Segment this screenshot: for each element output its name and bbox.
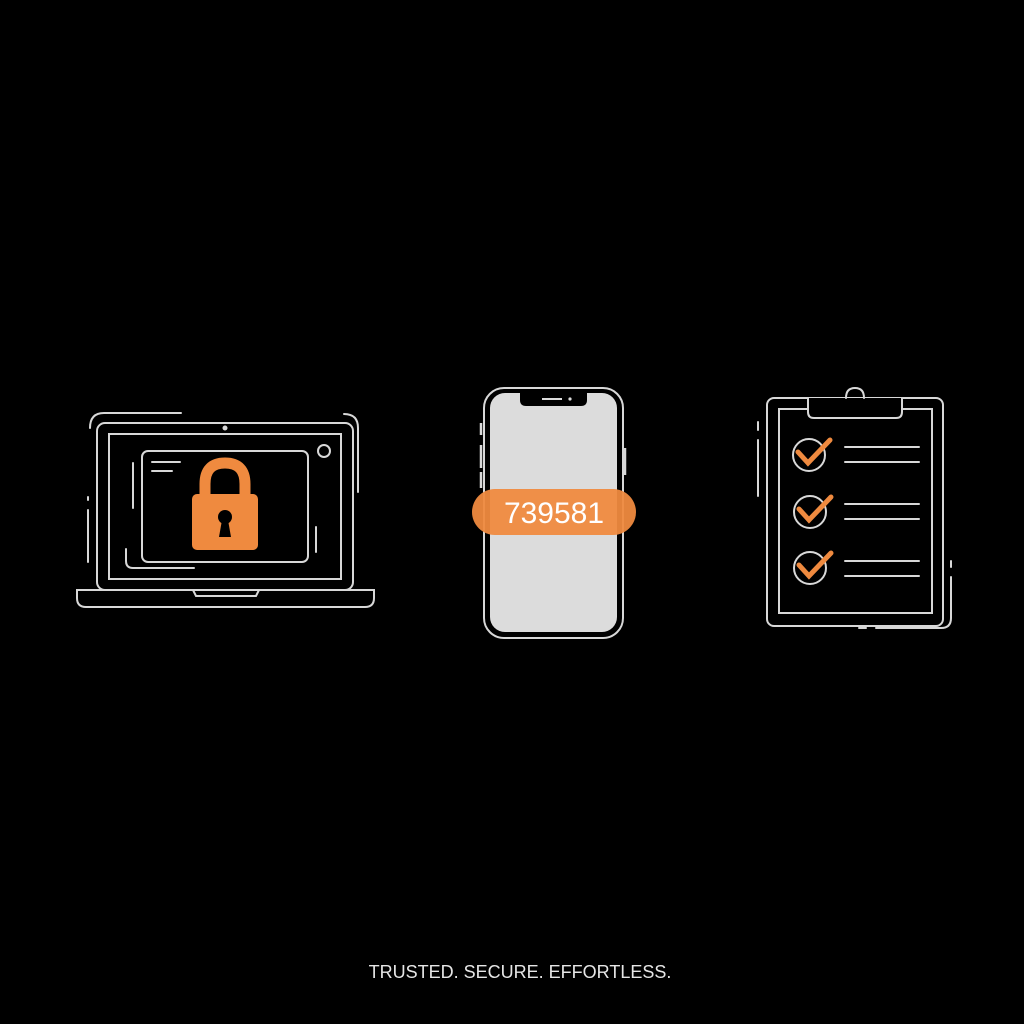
tagline: TRUSTED. SECURE. EFFORTLESS. [369,962,671,982]
icon: clipboard checklist [758,388,951,628]
code badge: 739581 [504,497,604,530]
icon: phone with code [472,388,636,638]
icon: laptop with lock [77,413,374,607]
code badge [472,489,636,535]
icon: padlock [192,463,258,550]
